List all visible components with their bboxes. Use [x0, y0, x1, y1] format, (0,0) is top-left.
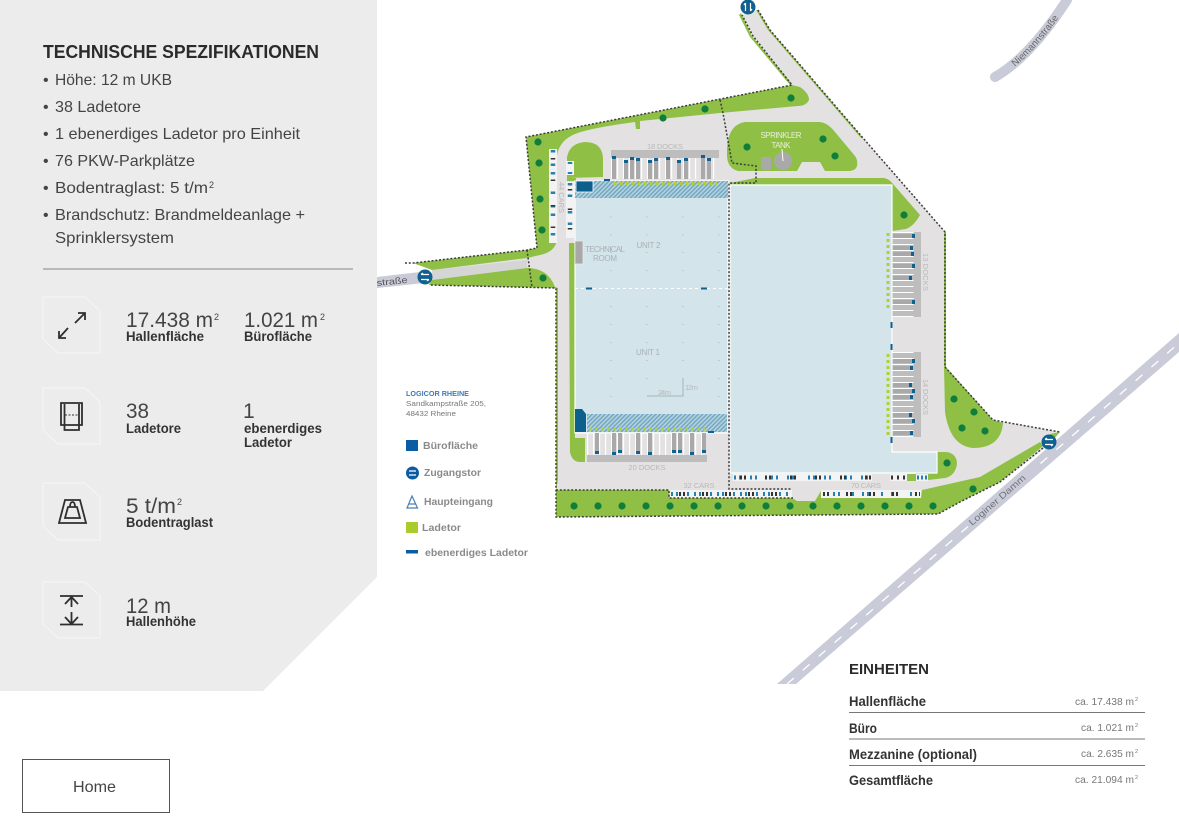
stat: loading docks: [126, 400, 181, 436]
icon: area arrows: [43, 297, 100, 353]
paved site area: [429, 10, 1060, 517]
green: north of big building: [730, 178, 920, 231]
address block: Sandkampstraße 205,: [406, 399, 486, 408]
road entrance grey lane: [432, 260, 527, 280]
address block: LOGICOR RHEINE: [406, 391, 469, 398]
specification list: 1 ebenerdiges Ladetor pro Einheit: [55, 126, 301, 143]
stat: office area: 2: [320, 312, 325, 322]
specification list: •: [43, 207, 49, 224]
stat: floor load: 2: [177, 497, 182, 507]
stat: floor load: 5 t/m: [126, 495, 176, 518]
map labels: UNIT 1: [636, 348, 661, 357]
road: Niemannstraße: Niemannstraße: [1011, 16, 1058, 66]
parking west inner: [566, 161, 574, 238]
map labels: ROOM: [593, 254, 617, 263]
office north: [576, 181, 593, 192]
specification list: •: [43, 180, 49, 197]
ground level doors: [586, 179, 892, 443]
address block: [406, 391, 486, 418]
parking west outer: [549, 149, 557, 243]
site plan: [405, 10, 1060, 517]
dimension marks: [647, 378, 698, 397]
specification list: 2: [209, 180, 214, 190]
specification list: •: [43, 72, 49, 89]
trees: [534, 94, 989, 510]
row: total: 2: [1135, 775, 1138, 781]
building: big hall: [730, 185, 937, 473]
stat: ground level door: Ladetor: [244, 435, 293, 450]
row: hall area: 2: [1135, 697, 1138, 703]
specification list: [43, 72, 305, 247]
specification list: •: [43, 99, 49, 116]
green: north and west strip: [413, 85, 809, 270]
road: Niemannstraße: [990, 0, 1072, 82]
green: south strip: [556, 442, 1043, 517]
green: inner blob north-west: [567, 142, 603, 181]
stat: hall area: [126, 309, 219, 344]
row: total: [849, 773, 1138, 788]
legend: [406, 440, 528, 559]
stat: hall area: 2: [214, 312, 219, 322]
stat: hall area: 17.438 m: [126, 309, 213, 332]
specification list: 38 Ladetore: [55, 99, 141, 116]
icon: loading door: [43, 388, 100, 444]
map labels: 20 DOCKS: [628, 463, 666, 472]
map labels: 44 CARS: [557, 182, 566, 213]
specification list: 76 PKW-Parkplätze: [55, 153, 195, 170]
row: office: 2: [1135, 723, 1138, 729]
green: south-east garden: [944, 367, 1003, 448]
docks east 13: [888, 232, 921, 317]
grid dots: [610, 216, 720, 397]
row: office: [849, 721, 1145, 739]
parking south row 32 cars: [670, 490, 792, 498]
stat: ground level door: [243, 400, 322, 450]
row: hall area: [849, 694, 1145, 712]
table heading: EINHEITEN: [849, 661, 929, 678]
row: mezzanine: [849, 747, 1145, 766]
road: Sandkampstraße stub: straße: [376, 275, 408, 288]
map labels: UNIT 2: [636, 241, 661, 250]
table: units: [849, 661, 1145, 788]
stat: loading docks: 38: [126, 400, 149, 423]
row: total: ca. 21.094 m: [1075, 774, 1134, 786]
stat: ground level door: ebenerdiges: [244, 421, 322, 436]
map labels: 13 DOCKS: [921, 253, 930, 291]
legend: loading door: Ladetor: [422, 523, 461, 534]
row: office: Büro: [849, 721, 877, 736]
row: hall area: Hallenfläche: [849, 694, 926, 709]
row: hall area: ca. 17.438 m: [1075, 696, 1134, 708]
hatched mezzanine north: [575, 181, 728, 198]
green: south of entrance road: [429, 268, 558, 490]
legend: main entrance: Haupteingang: [424, 497, 493, 508]
stat: hall height: Hallenhöhe: [126, 614, 196, 629]
home button: Home: [73, 779, 116, 796]
stat: office area: 1.021 m: [244, 309, 318, 332]
building: units 1 and 2: [575, 181, 728, 433]
legend: access gate: Zugangstor: [424, 468, 481, 479]
map labels: 18 DOCKS: [647, 142, 683, 151]
dimension marks: 12 m: [685, 383, 698, 392]
map labels: [557, 142, 930, 490]
parking south row 70 cars: [821, 490, 921, 498]
stat: ground level door: 1: [243, 400, 255, 423]
road: Loginer Damm: [777, 333, 1179, 684]
stat: hall height: [126, 595, 196, 629]
docks north: [611, 150, 719, 184]
sprinkler tank: TANK: [772, 141, 791, 150]
docks south: [587, 429, 707, 462]
row: office: ca. 1.021 m: [1081, 722, 1134, 734]
green: sprinkler area: [727, 122, 857, 171]
green: inner strip west of building: [569, 243, 585, 462]
stat: floor load: Bodentraglast: [126, 515, 213, 530]
technical room: [575, 241, 583, 264]
stat: office area: Bürofläche: [244, 329, 312, 344]
stat: hall area: Hallenfläche: [126, 329, 204, 344]
row: mezzanine: 2: [1135, 749, 1138, 755]
icon: access gate east: [1042, 434, 1056, 450]
map labels: 70 CARS: [851, 481, 881, 490]
sprinkler tank: [760, 131, 802, 170]
sprinkler tank: SPRINKLER: [760, 131, 802, 140]
specification list: •: [43, 126, 49, 143]
road: Loginer Damm: Loginer Damm: [967, 473, 1028, 528]
map labels: TECHNICAL: [585, 245, 626, 254]
specification list: Höhe: 12 m UKB: [55, 72, 172, 89]
stat: office area: [244, 309, 325, 344]
legend: office: Bürofläche: [423, 441, 478, 452]
green: blob east of annex: [916, 452, 957, 480]
unit divider: [575, 288, 727, 290]
icon: access gate north: [740, 0, 756, 14]
icon: hall height: [43, 582, 100, 638]
specification list: Brandschutz: Brandmeldeanlage +: [55, 207, 305, 224]
row: mezzanine: Mezzanine (optional): [849, 747, 977, 762]
dimension marks: 24 m: [658, 388, 671, 397]
address block: 48432 Rheine: [406, 409, 456, 418]
heading: TECHNISCHE SPEZIFIKATIONEN: [43, 42, 319, 62]
home button: [22, 760, 170, 812]
specification list: •: [43, 153, 49, 170]
road: Sandkampstraße stub: [376, 272, 424, 288]
map labels: 32 CARS: [684, 481, 714, 490]
parking south row building: [733, 474, 928, 481]
specification list: Sprinklersystem: [55, 230, 174, 247]
row: mezzanine: ca. 2.635 m: [1081, 748, 1134, 760]
specification list: Bodentraglast: 5 t/m: [55, 180, 208, 197]
hatched mezzanine south: [587, 414, 727, 432]
icon: floor load: [43, 483, 100, 540]
green: road edge strips: [739, 10, 946, 367]
stat: floor load: [126, 495, 213, 530]
row: total: Gesamtfläche: [849, 773, 933, 788]
map labels: 14 DOCKS: [921, 379, 930, 415]
docks east 14: [888, 352, 921, 437]
office south: [575, 409, 586, 432]
stat: loading docks: Ladetore: [126, 421, 181, 436]
stat: hall height: 12 m: [126, 595, 171, 618]
panel: technical specifications: [0, 0, 377, 691]
icon: access gate west: [418, 270, 432, 284]
site boundary dashed line: [405, 10, 1060, 517]
legend: ground level door: ebenerdiges Ladetor: [425, 548, 528, 559]
